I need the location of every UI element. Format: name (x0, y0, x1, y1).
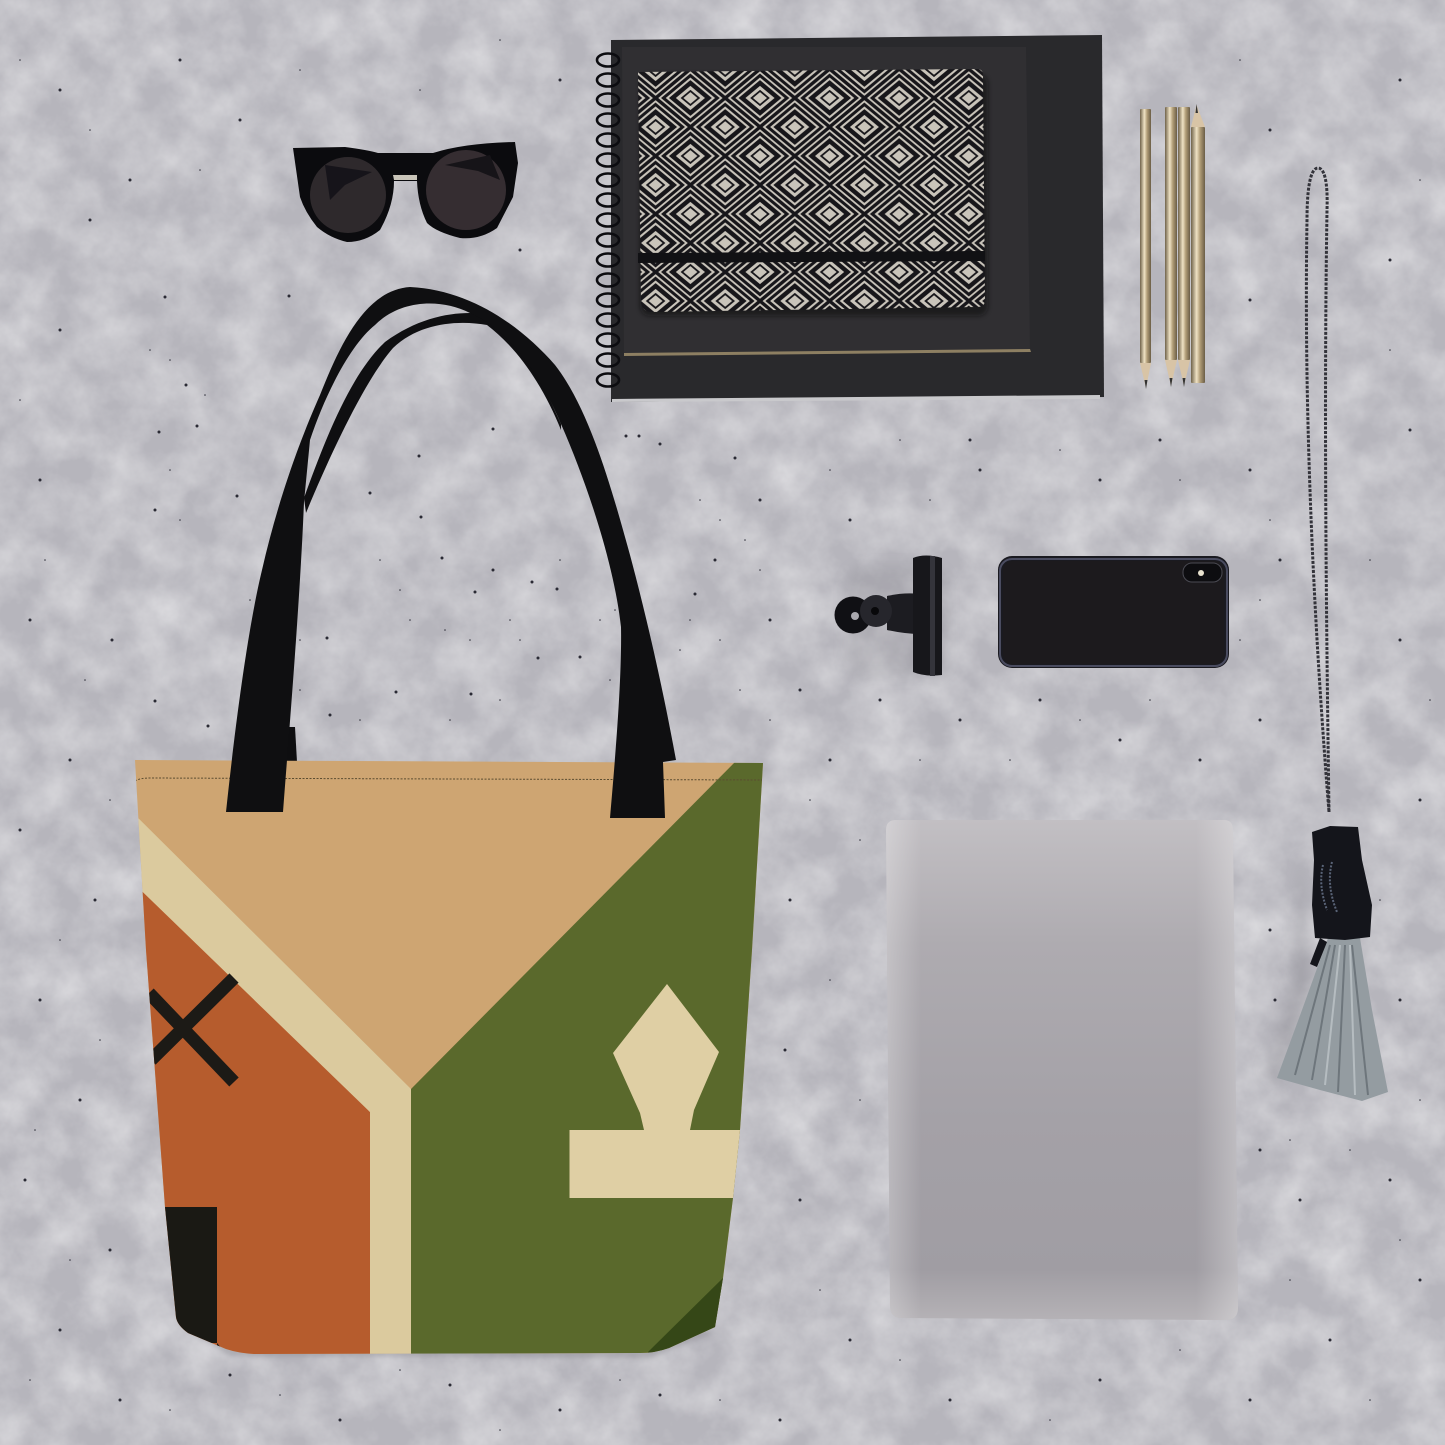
pencil 2 (1165, 107, 1177, 387)
clip pivot (860, 595, 892, 627)
elastic band (638, 251, 985, 263)
binder clip (834, 556, 948, 678)
tassel threads (1277, 938, 1388, 1101)
top stitch line (135, 778, 763, 781)
necklace (1262, 168, 1388, 1101)
patterned notebook (638, 69, 985, 312)
green panel (411, 760, 790, 1370)
tassel shadow (1262, 850, 1312, 1085)
dark green corner (648, 1278, 723, 1353)
bag handles, rear ends (286, 727, 297, 762)
right lens (426, 150, 506, 230)
front handle (226, 287, 676, 818)
laptop (886, 820, 1238, 1320)
clip neck (887, 593, 920, 634)
cream emblem (570, 984, 740, 1198)
spiral binding (597, 54, 619, 386)
cream Y band (138, 818, 411, 1354)
tassel loop (1310, 938, 1327, 967)
sunglasses (293, 142, 518, 242)
metal bridge (393, 175, 417, 180)
clip shadow (845, 565, 948, 678)
clip back ring (834, 596, 872, 634)
pencil 4 (1191, 104, 1205, 383)
black X (149, 978, 234, 1082)
orange panel (142, 892, 370, 1354)
chain (1306, 168, 1329, 812)
medium notebook (622, 47, 1030, 355)
frame (293, 142, 518, 242)
bag shadow (176, 1322, 716, 1358)
pencil 3 (1178, 107, 1190, 387)
bead highlights (1321, 862, 1337, 912)
patterned notebook shadow (640, 74, 988, 316)
notebook stack (597, 35, 1104, 402)
phone camera (1183, 563, 1222, 582)
tan panel (120, 750, 780, 1370)
large black notebook (611, 35, 1104, 402)
tassel beads (1312, 826, 1372, 940)
clip bar (913, 556, 942, 676)
bag body (135, 760, 763, 1354)
back handle (304, 313, 561, 513)
pencil 1 (1140, 109, 1151, 389)
black rectangle (165, 1207, 217, 1343)
pencils (1140, 104, 1205, 389)
tote bag (120, 287, 790, 1370)
smartphone (998, 556, 1229, 668)
left lens (310, 157, 386, 233)
